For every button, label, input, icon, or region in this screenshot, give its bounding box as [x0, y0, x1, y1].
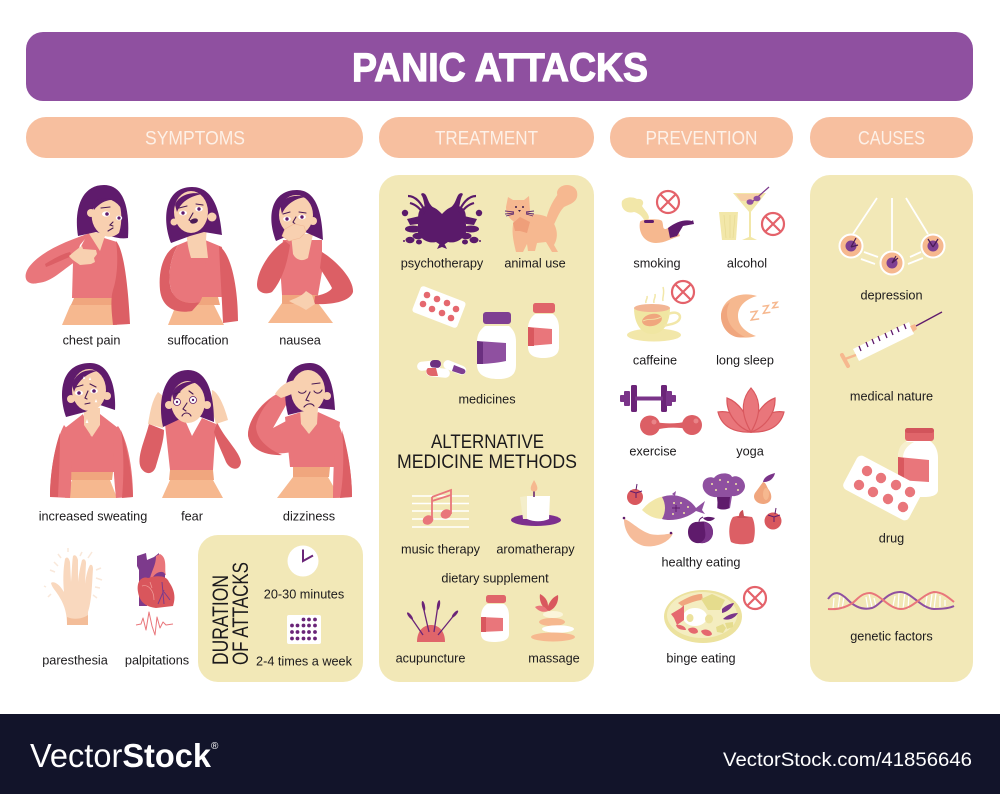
icon: woman covering mouth [257, 190, 353, 323]
icon: healthy foods [623, 473, 782, 546]
heading: alternative medicine methods: ALTERNATIVE [431, 432, 544, 453]
icon: dizzy woman [248, 363, 352, 498]
item: psychotherapy [401, 193, 484, 271]
icon: woman holding throat [160, 187, 238, 325]
icon: red dumbbell [640, 415, 702, 436]
symptom: nausea [257, 190, 353, 348]
title banner: PANIC ATTACKS [352, 46, 648, 90]
label: acupuncture [396, 652, 465, 666]
icon: blister pack [412, 285, 466, 329]
icon: acupuncture needles [406, 600, 459, 642]
icon: woman holding chest [26, 185, 130, 325]
label: aromatherapy [496, 543, 575, 557]
label: animal use [504, 257, 566, 271]
label: healthy eating [661, 556, 741, 570]
panel: symptoms [26, 117, 363, 682]
symptom: chest pain [26, 185, 130, 348]
icon: music note [412, 490, 469, 527]
item: acupuncture [396, 600, 465, 666]
icon: inkblot [402, 193, 482, 249]
heading: alternative medicine methods [397, 432, 577, 473]
icon: candle [511, 480, 561, 526]
title banner [26, 32, 973, 101]
item: depression [840, 198, 944, 303]
heading: alternative medicine methods: MEDICINE METHODS [397, 452, 577, 473]
panel: duration of attacks [198, 535, 363, 682]
label: exercise [629, 445, 677, 459]
item: long sleep [716, 294, 780, 368]
symptom: suffocation [160, 187, 238, 348]
icon: clock [288, 546, 318, 576]
logo: VectorStock: VectorStock [30, 737, 212, 774]
label: caffeine [633, 354, 677, 368]
item: animal use [504, 185, 577, 271]
icon: lotus [718, 388, 784, 432]
icon: purple barbell [620, 385, 676, 412]
label: binge eating [666, 652, 736, 666]
label: dietary supplement: dietary supplement [441, 572, 549, 586]
item: binge eating [664, 587, 766, 666]
item: healthy eating [623, 473, 782, 570]
icon: plate of food [664, 590, 742, 643]
image id: VectorStock.com/41856646 [723, 750, 972, 771]
symptom: dizziness [248, 363, 352, 524]
item: smoking [622, 191, 694, 271]
label: palpitations [125, 654, 189, 668]
item: music therapy [401, 490, 481, 557]
icon: pendulums [840, 198, 944, 274]
label: drug [879, 532, 904, 546]
symptom: palpitations [125, 553, 189, 668]
heading: duration of attacks [208, 562, 253, 665]
logo mark: ® [211, 741, 219, 752]
icon: cat [505, 185, 577, 252]
text: 2-4 times a week: 2-4 times a week [256, 655, 353, 669]
icon: prohibited sign [672, 281, 694, 303]
icon: heart with pulse [136, 553, 174, 635]
panel: treatment [379, 117, 594, 682]
label: nausea [279, 334, 322, 348]
label: long sleep [716, 354, 774, 368]
symptom: increased sweating [39, 363, 147, 524]
label: yoga [736, 445, 765, 459]
icon: coffee cup [627, 287, 681, 342]
icon: tingling hand [44, 548, 102, 625]
label: massage [528, 652, 580, 666]
panel: prevention [610, 117, 793, 666]
item: aromatherapy [496, 480, 575, 557]
heading: duration of attacks: DURATION [208, 575, 233, 665]
icon: moon and zzz [721, 294, 780, 338]
heading: prevention [610, 117, 793, 158]
icon: drinks [719, 187, 769, 240]
label: fear [181, 510, 204, 524]
label: paresthesia [42, 654, 109, 668]
icon: blister pack [841, 454, 925, 522]
heading: duration of attacks: OF ATTACKS [228, 562, 253, 665]
panel: causes [810, 117, 973, 682]
icon: syringe [842, 312, 942, 366]
icon: pipe with smoke [622, 197, 694, 243]
symptom: fear [140, 370, 241, 524]
item: exercise [620, 385, 702, 459]
item: yoga [718, 388, 784, 459]
label: alcohol [727, 257, 767, 271]
heading: treatment: TREATMENT [435, 128, 538, 150]
item: medicines [412, 285, 559, 407]
icon: prohibited sign [657, 191, 679, 213]
icon: frightened woman [140, 370, 241, 498]
label: medicines [458, 393, 516, 407]
label: psychotherapy [401, 257, 484, 271]
icon: pill bottle [898, 428, 938, 497]
icon: capsules [417, 359, 468, 378]
heading: symptoms: SYMPTOMS [145, 128, 245, 150]
icon: calendar [287, 615, 321, 644]
footer bar [0, 714, 1000, 794]
item: caffeine [627, 281, 694, 368]
label: suffocation [167, 334, 229, 348]
label: genetic factors [850, 630, 933, 644]
label: chest pain [63, 334, 120, 348]
icon: red bottle [528, 303, 559, 358]
heading: symptoms [26, 117, 363, 158]
heading: prevention: PREVENTION [646, 128, 758, 150]
item: massage [528, 594, 580, 666]
item: medical nature [842, 312, 942, 404]
label: increased sweating [39, 510, 147, 524]
icon: prohibited sign [762, 213, 784, 235]
item: drug [841, 428, 938, 546]
heading: treatment [379, 117, 594, 158]
icon: supplement bottle [481, 595, 509, 642]
icon: prohibited sign [744, 587, 766, 609]
symptom: paresthesia [42, 548, 109, 668]
label: smoking [633, 257, 681, 271]
label: depression [860, 289, 923, 303]
label: dizziness [283, 510, 335, 524]
icon: massage stones [531, 594, 575, 642]
icon: sweating woman [50, 363, 133, 498]
text: 20-30 minutes: 20-30 minutes [264, 588, 344, 602]
label: medical nature [850, 390, 933, 404]
icon: dna helix [828, 592, 954, 609]
item: genetic factors [828, 592, 954, 644]
heading: causes: CAUSES [858, 128, 925, 150]
heading: causes [810, 117, 973, 158]
label: music therapy [401, 543, 481, 557]
item: alcohol [719, 187, 784, 271]
icon: purple bottle [477, 312, 516, 379]
